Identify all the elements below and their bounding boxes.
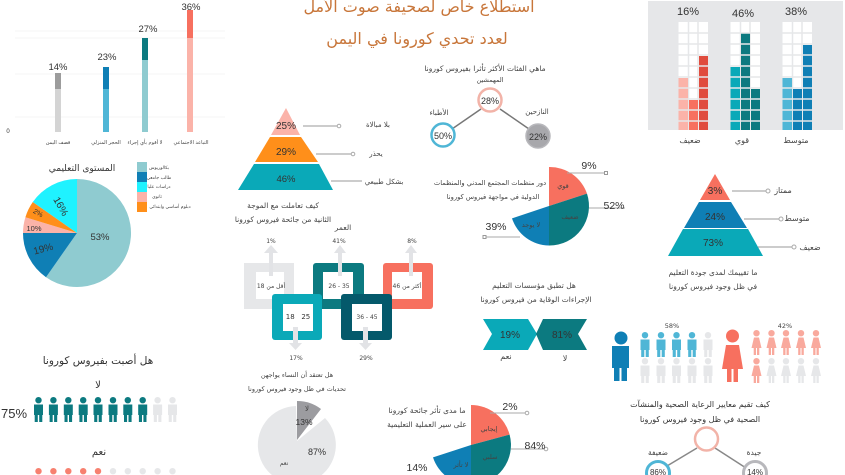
education pie chart: 53% <box>90 232 110 243</box>
network: most affected groups: 22% <box>529 132 547 142</box>
panel: grid columns: 46% <box>732 8 754 20</box>
pictogram: yes <box>34 468 177 475</box>
gender pictogram: 42% <box>778 322 792 330</box>
chevrons: prevention measures: نعم <box>500 352 512 361</box>
network: most affected groups: المهمشين <box>476 76 504 84</box>
pyramid: dealing with second wave: بشكل طبيعي <box>365 178 403 186</box>
network: most affected groups <box>424 63 550 148</box>
women challenges pie chart: نعم <box>280 460 289 467</box>
men row <box>640 332 712 383</box>
panel: grid columns: قوي <box>735 136 749 145</box>
bar: blue: الحجر المنزلي <box>91 140 121 146</box>
chevrons: prevention measures: لا <box>563 354 567 363</box>
network: healthcare standards: جيدة <box>747 448 762 457</box>
panel: infected with corona: 75% <box>1 406 27 421</box>
bar: coral <box>173 2 209 146</box>
pyramid: dealing with second wave: 29% <box>276 147 296 158</box>
women challenges pie chart: تحديات في ظل وجود فيروس كورونا <box>248 385 346 393</box>
bar: coral: التباعد الاجتماعي <box>173 140 209 146</box>
pyramid: education quality: ضعيف <box>799 243 821 252</box>
pie: civil society role: دور منظمات المجتمع المدني والمنظمات <box>434 179 546 187</box>
panel: grid columns: ضعيف <box>679 136 701 145</box>
age: 18-25 <box>272 294 322 362</box>
panel: infected with corona <box>1 353 177 475</box>
bar: teal: 27% <box>138 24 158 35</box>
pie: civil society role <box>434 160 625 246</box>
age chart: interlocking squares: العمر <box>334 223 351 232</box>
chevrons: prevention measures <box>480 281 592 363</box>
pie: civil society role: ضعيف <box>561 213 579 221</box>
title <box>303 0 535 49</box>
panel: infected with corona: لا <box>95 380 101 391</box>
chevrons: prevention measures: هل تطبق مؤسسات التعليم <box>492 281 576 290</box>
pie: impact on education: ما مدى تأثر جائحة كورونا <box>388 405 466 415</box>
panel: grid columns: 16% <box>677 6 699 18</box>
age: 36-45: 29% <box>359 355 373 362</box>
network: healthcare standards: الصحية في ظل وجود فيروس كورونا <box>640 415 760 424</box>
pyramid: dealing with second wave: 46% <box>276 174 296 185</box>
age: over 46: أكثر من 46 <box>393 282 422 290</box>
pie legend: دراسات عليا <box>147 185 171 190</box>
pyramid: education quality: 3% <box>708 186 722 197</box>
pyramid: education quality: ما تقييمك لمدى جودة التعليم <box>668 268 758 277</box>
education pie chart: 10% <box>26 224 42 233</box>
age: 36-45: 36 - 45 <box>356 314 378 321</box>
chevrons: prevention measures: 19% <box>500 330 520 341</box>
pie: civil society role: قوي <box>557 182 569 190</box>
panel: infected with corona: نعم <box>92 447 106 458</box>
pyramid: dealing with second wave <box>238 108 403 190</box>
women challenges pie chart: لا <box>305 405 309 413</box>
network: most affected groups: 50% <box>434 131 452 141</box>
age: under 18 <box>244 238 294 309</box>
education pie chart: 2% <box>32 208 44 219</box>
age: 26-35: 41% <box>332 238 346 245</box>
women challenges pie chart: هل تعتقد أن النساء يواجهن <box>261 370 334 379</box>
pie: civil society role: 39% <box>485 221 507 233</box>
bar: coral: 36% <box>181 2 201 13</box>
pyramid: education quality <box>668 174 821 291</box>
network: most affected groups: 28% <box>481 96 499 106</box>
bar: teal: لا أقوم بأي إجراء <box>128 138 163 146</box>
network: most affected groups: الأطباء <box>429 108 449 117</box>
group: weak <box>678 56 708 130</box>
women challenges pie chart: 87% <box>308 447 326 457</box>
bar chart: sectors <box>6 2 225 146</box>
age: over 46: 8% <box>407 238 417 245</box>
white cell grid <box>678 22 812 130</box>
age: 36-45 <box>341 294 392 362</box>
pyramid: education quality: 24% <box>705 212 725 223</box>
pie legend: ثانوي <box>152 195 163 200</box>
bar: gray <box>46 62 71 146</box>
education pie chart: 19% <box>32 242 55 257</box>
pie: civil society role: 9% <box>581 160 597 172</box>
bar: teal <box>128 24 163 146</box>
pie: impact on education: إيجابي <box>480 425 498 433</box>
age: 18-25: 17% <box>289 355 303 362</box>
group: strong <box>730 33 760 130</box>
pie legend: طالب جامعي <box>147 176 172 181</box>
panel: grid columns <box>648 1 843 145</box>
pyramid: education quality: في ظل وجود فيروس كورونا <box>669 282 758 291</box>
pyramid: dealing with second wave: 25% <box>276 121 296 132</box>
pie legend <box>137 162 191 212</box>
age: under 18: 1% <box>266 238 276 245</box>
network: healthcare standards: كيف تقيم معايير الرعاية الصحية والمنشآت <box>630 399 770 409</box>
bar: gray: قصف اليمن <box>46 140 71 146</box>
age: 18-25: 18 25 <box>286 313 310 321</box>
text: second wave question <box>235 201 331 224</box>
panel: grid columns: متوسط <box>783 136 809 145</box>
pie legend: دبلوم أساسي وابتدائي <box>149 203 191 210</box>
bar chart: sectors: 0 <box>6 129 10 135</box>
text: second wave question: الثانية من جائحة فيروس كورونا <box>235 215 331 224</box>
age: over 46 <box>383 238 433 309</box>
gender pictogram: 58% <box>665 322 679 330</box>
education pie chart: 16% <box>50 195 70 218</box>
women row <box>752 330 821 383</box>
pie: civil society role: لا يوجد <box>522 221 540 229</box>
pie: civil society role: 52% <box>603 200 625 212</box>
panel: grid columns: 38% <box>785 6 807 18</box>
pictogram: no <box>34 397 177 422</box>
bar: blue: 23% <box>97 52 117 63</box>
pie: civil society role: الدولية في مواجهة فيروس كورونا <box>447 193 539 201</box>
pie: impact on education: لا تأثر <box>453 460 469 469</box>
network: most affected groups: النازحين <box>525 108 549 116</box>
women challenges pie chart: 13% <box>295 417 313 427</box>
pyramid: education quality: ممتاز <box>773 186 792 195</box>
education pie chart <box>23 164 131 287</box>
pyramid: education quality: 73% <box>703 238 723 249</box>
network: healthcare standards: ضعيفة <box>648 448 668 457</box>
pie: impact on education: 84% <box>524 440 546 452</box>
pie: impact on education: 14% <box>406 462 428 474</box>
pyramid: dealing with second wave: بلا مبالاة <box>366 121 390 129</box>
chevrons: prevention measures: 81% <box>552 330 572 341</box>
pie: impact on education: سلبي <box>483 453 497 461</box>
pie: impact on education: 2% <box>502 401 518 413</box>
age: under 18: أقل من 18 <box>257 282 285 290</box>
pyramid: education quality: متوسط <box>784 214 810 223</box>
age: 26-35 <box>313 238 364 309</box>
heading: education level: المستوى التعليمي <box>49 164 115 174</box>
pie: impact on education <box>387 401 548 475</box>
pie: impact on education: على سير العملية التعليمية <box>387 420 467 429</box>
bar: gray: 14% <box>48 62 68 73</box>
group: medium <box>782 45 812 130</box>
bar: blue <box>91 52 121 146</box>
text: second wave question: كيف تعاملت مع الموجة <box>247 201 319 210</box>
network: most affected groups: ماهي الفئات الأكثر تأثرا بفيروس كورونا <box>424 63 546 73</box>
pyramid: dealing with second wave: يحذر <box>368 150 383 158</box>
gender pictogram <box>612 322 821 383</box>
chevrons: prevention measures: الإجراءات الوقاية من فيروس كورونا <box>480 295 592 304</box>
pie legend: بكالوريوس <box>149 165 169 171</box>
icon: man <box>612 332 629 381</box>
network: healthcare standards <box>630 399 770 475</box>
title: لعدد تحدي كورونا في اليمن <box>326 29 508 49</box>
women challenges pie chart <box>248 370 346 475</box>
age chart: interlocking squares <box>244 223 433 362</box>
heading: هل أصبت بفيروس كورونا <box>43 353 153 367</box>
age: 26-35: 26 - 35 <box>328 283 350 290</box>
icon: woman <box>722 330 743 382</box>
